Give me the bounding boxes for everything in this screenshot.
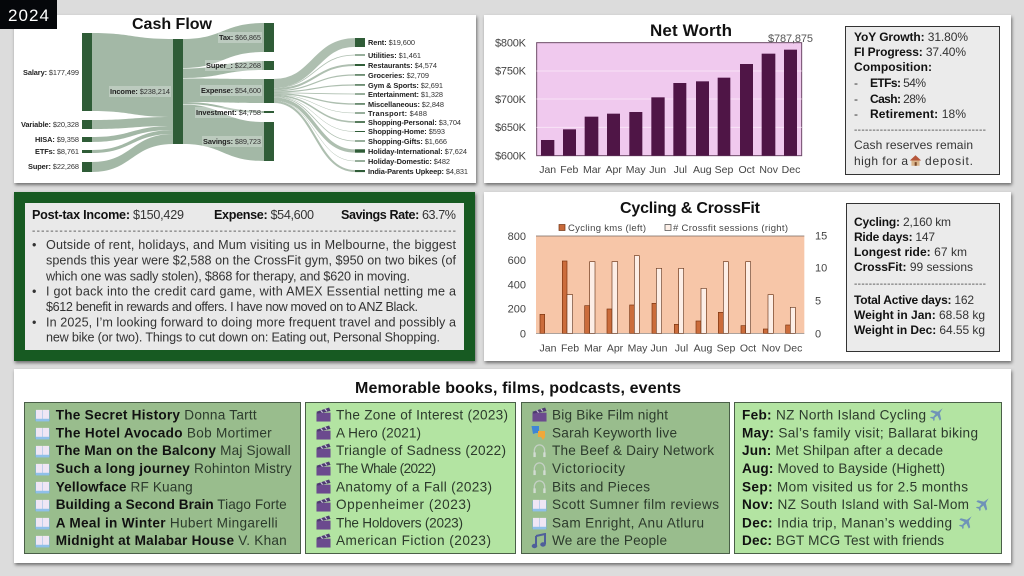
right axis labels: 15 [815,231,827,243]
panel: cycling and crossfit [484,192,1011,361]
y axis labels: $650K [495,122,527,134]
list: podcasts and events: Big Bike Film night [552,408,668,423]
list: films: The Holdovers (2023) [336,515,463,530]
stats box: net worth: YoY Growth: 31.80% [854,30,968,44]
sankey labels: Entertainment: $1,328 [368,90,443,99]
sankey labels: Super_: $22,268 [206,61,261,70]
left axis labels: 400 [508,279,526,291]
list: podcasts and events: Sam Enright, Anu Atluru [552,515,704,530]
y axis labels [495,38,527,162]
sankey labels: ETFs: $8,761 [35,147,79,156]
x axis labels: Jul [675,342,688,354]
x axis labels: Oct [740,342,756,354]
stats box: net worth: - [854,92,858,106]
x axis labels: Nov [759,164,779,176]
sankey labels [21,33,468,176]
stats box: activity: Weight in Jan: 68.58 kg [854,308,985,322]
summary numbers: Savings Rate: 63.7% [341,208,456,222]
list: books: Such a long journey Rohinton Mistry [56,461,292,476]
stats box: net worth: high for a [854,154,908,168]
stats box: net worth: FI Progress: 37.40% [854,45,966,59]
right axis labels: 5 [815,296,821,308]
list: films: Oppenheimer (2023) [336,497,471,512]
x axis labels: Jun [651,342,668,354]
year tab: 2024 [8,6,49,25]
sankey nodes [82,23,365,172]
sankey labels: Investment: $4,758 [196,108,261,117]
stats box: net worth: Cash reserves remain [854,138,973,152]
list: podcasts and events: Sarah Keyworth live [552,425,677,440]
sankey labels: Transport: $488 [368,109,427,118]
x axis labels: Sep [715,164,733,176]
icon: house [910,155,921,166]
list: films: Anatomy of a Fall (2023) [336,479,492,494]
x axis labels: Jan [540,342,557,354]
summary numbers: Post-tax Income: $150,429 [32,208,184,222]
panel: cash flow [14,15,476,183]
sankey labels: Savings: $89,723 [203,137,261,146]
list: films: A Hero (2021) [336,425,421,440]
left axis labels: 600 [508,255,526,267]
bullet list: spends this year were $2,588 on the CrossFit gym, $950 on two bikes (of [46,254,456,268]
x axis labels: May [628,342,648,354]
stats box: net worth: - [854,76,858,90]
list: films: American Fiction (2023) [336,533,491,548]
sankey labels: Super: $22,268 [28,162,79,171]
bullet list: which one was sadly stolen), $868 for therapy, and $620 in moving. [45,269,410,283]
legend: # Crossfit sessions (right) [673,223,788,234]
stats box: activity: Cycling: 2,160 km [854,215,951,229]
year tab [0,0,57,29]
right axis labels: 10 [815,262,827,274]
x axis labels: Dec [784,342,802,354]
summary numbers: Expense: $54,600 [214,208,314,222]
x axis labels: Feb [561,342,579,354]
sankey labels: Income: $238,214 [110,87,170,96]
list: podcasts and events: Scott Sumner film reviews [552,497,719,512]
stats box: net worth [846,26,1000,174]
bar chart: net worth [495,33,813,176]
heading: cycling and crossfit: Cycling & CrossFit [620,200,761,217]
list: books: The Hotel Avocado Bob Mortimer [56,425,272,440]
list: events: Nov: NZ South Island with Sal-Mom [742,497,969,512]
bullet list: I got back into the credit card game, with AMEX Essential netting me a [46,285,456,299]
x axis labels: Jul [674,164,687,176]
sankey labels: Miscellaneous: $2,848 [368,100,444,109]
list: books: Building a Second Brain Tiago Forte [56,497,287,512]
x axis labels: Sep [717,342,735,354]
bullet list [32,238,456,345]
bullet list: • [32,315,36,329]
x axis labels: Jan [539,164,556,176]
list: books: Yellowface RF Kuang [56,479,193,494]
panel: net worth [484,15,1011,183]
x axis labels: Aug [693,164,712,176]
stats box: net worth: ------------------------------------ [854,125,986,136]
list: books: Midnight at Malabar House V. Khan [56,533,287,548]
stats box: net worth: - [854,107,858,121]
list: films [306,402,516,554]
sankey labels: Variable: $20,328 [21,120,79,129]
bullet list: $612 benefit in rewards and offers. I have now moved on to ANZ Black. [46,300,418,314]
sankey labels: Restaurants: $4,574 [368,61,437,70]
sankey labels: Gym & Sports: $2,691 [368,81,443,90]
list: books [24,402,300,554]
heading: net worth: Net Worth [650,21,732,40]
list: events: Feb: NZ North Island Cycling [742,408,926,423]
sankey labels: Holiday-International: $7,624 [368,147,467,156]
stats box: activity: Weight in Dec: 64.55 kg [854,323,985,337]
bullet list: Outside of rent, holidays, and Mum visiting us in Melbourne, the biggest [46,238,456,252]
left axis labels: 200 [508,304,526,316]
list: events: Aug: Moved to Bayside (Highett) [742,461,945,476]
list: books: The Man on the Balcony Maj Sjowall [56,443,291,458]
data label: december: $787,875 [768,33,813,45]
stats box: activity: ------------------------------------ [854,279,986,290]
sankey labels: HISA: $9,358 [35,135,79,144]
list: podcasts and events: Bits and Pieces [552,479,650,494]
x axis labels: Dec [782,164,800,176]
stats box: activity: CrossFit: 99 sessions [854,260,973,274]
x axis labels: Oct [739,164,755,176]
sankey labels: Utilities: $1,461 [368,51,421,60]
right axis labels [815,231,827,340]
right axis labels: 0 [815,328,821,340]
list: events: Sep: Mom visited us for 2.5 months [742,479,968,494]
list: films: The Zone of Interest (2023) [336,408,508,423]
sankey labels: Shopping-Personal: $3,704 [368,118,461,127]
stats box: activity: Ride days: 147 [854,230,935,244]
sankey flows [92,23,264,172]
list: books: The Secret History Donna Tartt [56,408,257,423]
stats box: net worth: Cash: 28% [870,92,926,106]
x axis labels: Jun [649,164,666,176]
left axis labels: 0 [520,328,526,340]
x axis labels: Mar [584,342,603,354]
list: films: The Whale (2022) [336,461,436,476]
x axis labels: Aug [694,342,712,354]
x axis labels: Feb [560,164,579,176]
label backgrounds [109,32,262,147]
left axis labels [508,231,526,340]
x axis labels [539,164,800,176]
x axis labels: May [626,164,646,176]
list: films: Triangle of Sadness (2022) [336,443,506,458]
bullet list: new bike (or two). Things to cut down on: Eating out, Personal Shopping. [46,331,440,345]
x axis labels [540,342,802,354]
list: podcasts and events: We are the People [552,533,667,548]
x axis labels: Apr [606,164,622,176]
list: events: Dec: India trip, Manan’s wedding [742,515,952,530]
panel: summary text: --------------------------------------------------------------------------------------------- [32,226,456,237]
stats box: activity [846,204,1000,352]
legend [559,223,788,234]
stats box: net worth: Retirement: 18% [870,107,966,121]
sankey labels: Shopping-Gifts: $1,666 [368,137,447,146]
stats box: activity: Total Active days: 162 [854,293,974,307]
bullet list: In 2025, I’m looking forward to doing more frequent travel and possibly a [46,315,456,329]
y axis labels: $700K [495,94,527,106]
stats box: activity: Longest ride: 67 km [854,245,967,259]
list: podcasts and events: The Beef & Dairy Network [552,443,714,458]
list: podcasts and events [522,402,730,554]
x axis labels: Apr [607,342,624,354]
y axis labels: $750K [495,66,527,78]
list: books: A Meal in Winter Hubert Mingarelli [56,515,278,530]
list: podcasts and events: Victoriocity [552,461,625,476]
list: events: Jun: Met Shilpan after a decade [742,443,943,458]
sankey labels: Salary: $177,499 [23,68,79,77]
sankey labels: Holiday-Domestic: $482 [368,157,450,166]
stats box: net worth: ETFs: 54% [870,76,926,90]
left axis labels: 800 [508,231,526,243]
list: events: May: Sal’s family visit; Ballarat biking [742,425,978,440]
x axis labels: Nov [762,342,781,354]
x axis labels: Mar [583,164,602,176]
list: events: Dec: BGT MCG Test with friends [742,533,944,548]
stats box: net worth: Composition: [854,60,932,74]
bullet list: • [32,238,36,252]
sankey labels: Shopping-Home: $593 [368,127,445,136]
expense breakdown flows [274,42,355,171]
y axis labels: $800K [495,38,527,50]
summary numbers [32,208,456,222]
y axis labels: $600K [495,150,527,162]
list: events [734,402,1002,554]
bullet list: • [32,285,36,299]
heading: cash flow: Cash Flow [132,16,213,33]
sankey labels: India-Parents Upkeep: $4,831 [368,167,468,176]
stats box: net worth: deposit. [925,154,973,168]
heading: memorable: Memorable books, films, podcasts, events [355,380,681,397]
sankey labels: Tax: $66,865 [219,33,261,42]
legend: Cycling kms (left) [568,223,646,234]
sankey labels: Groceries: $2,709 [368,71,429,80]
panel: summary text [14,192,475,361]
bar chart: cycling and crossfit [508,231,827,354]
sankey labels: Rent: $19,600 [368,38,415,47]
sankey labels: Expense: $54,600 [201,86,261,95]
panel: memorable list [14,369,1011,563]
